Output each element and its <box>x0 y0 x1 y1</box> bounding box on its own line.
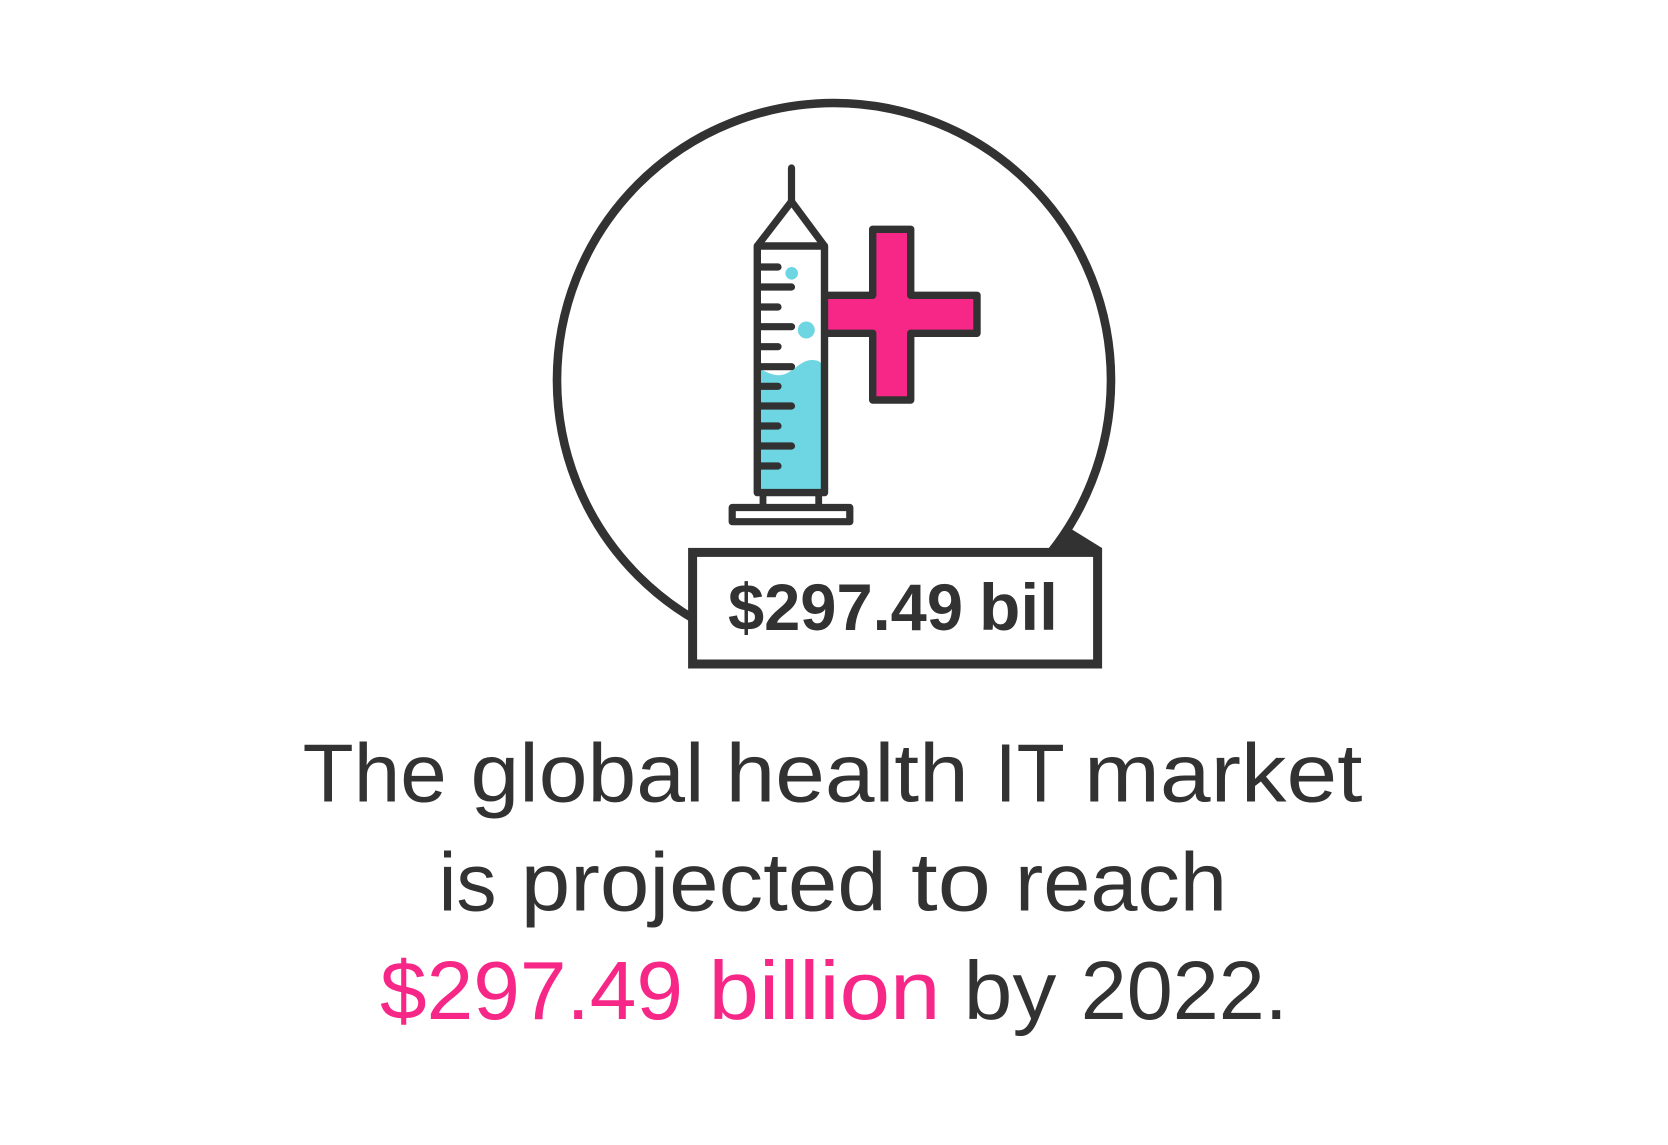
callout frame <box>693 552 1098 664</box>
line 1: global <box>470 726 704 820</box>
line 3 highlighted figure <box>380 944 940 1037</box>
line 3 remainder: by <box>964 944 1057 1037</box>
line 3 highlighted figure: billion <box>708 944 940 1037</box>
syringe plunger stems <box>763 495 819 507</box>
syringe needle <box>788 168 795 201</box>
syringe barrel outline <box>757 246 824 493</box>
icon: syringe <box>732 168 850 522</box>
line 1: The <box>303 726 447 820</box>
line 2 <box>439 836 1227 928</box>
line 2: is <box>439 836 497 928</box>
line 1: market <box>1084 726 1362 820</box>
line 3 highlighted figure: $297.49 <box>380 944 683 1037</box>
line 2: reach <box>1015 836 1227 928</box>
syringe liquid <box>760 360 822 490</box>
statement text <box>303 726 1363 1037</box>
line 1: health <box>726 726 969 820</box>
syringe barrel fill <box>757 246 824 493</box>
line 1: IT <box>995 726 1065 820</box>
syringe measurement ticks <box>760 267 792 466</box>
syringe plunger base <box>732 508 850 522</box>
large bubble <box>798 322 815 338</box>
icon: medical cross <box>824 229 977 400</box>
callout tail <box>1049 529 1102 552</box>
callout value: bil <box>979 570 1058 644</box>
line 2: to <box>911 836 991 928</box>
speech bubble circle <box>557 103 1111 657</box>
line 1 <box>303 726 1363 820</box>
value callout box <box>693 529 1102 664</box>
syringe cone <box>757 202 824 246</box>
callout value: $297.49 <box>728 570 963 644</box>
line 3 remainder: 2022. <box>1081 944 1288 1037</box>
line 2: projected <box>521 836 887 928</box>
small bubble <box>785 267 798 280</box>
line 3 remainder <box>964 944 1288 1037</box>
